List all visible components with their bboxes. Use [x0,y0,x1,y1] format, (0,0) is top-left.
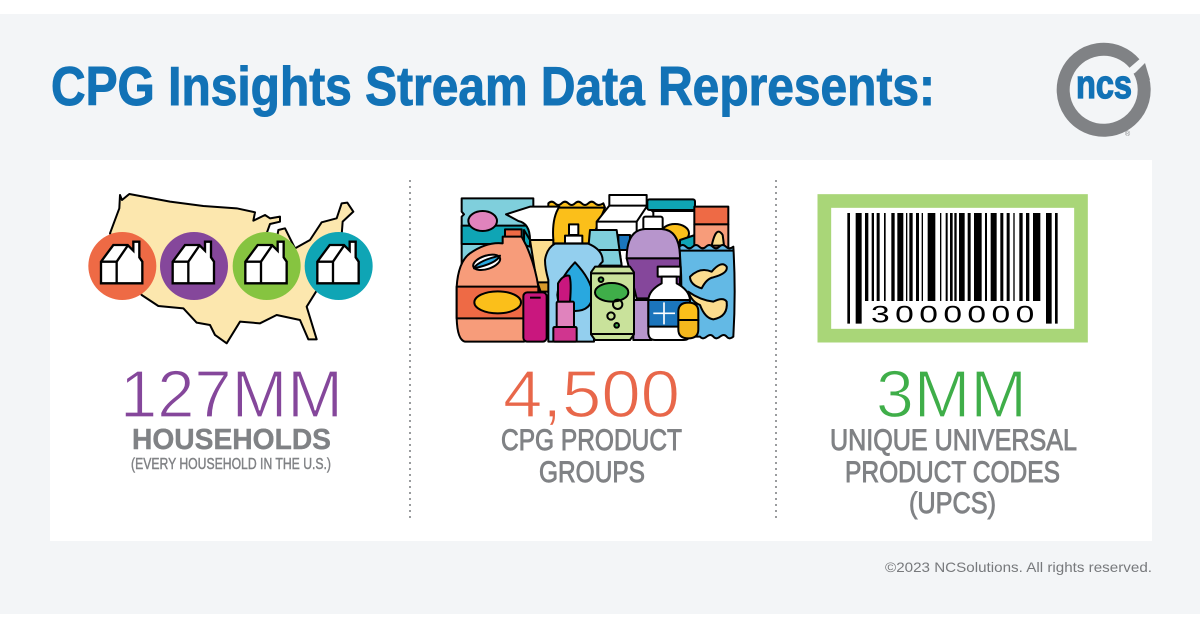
icon: barcode [824,201,1081,336]
label: CPG product groups: GROUPS [539,456,645,489]
chip bag [679,245,735,338]
teal box [647,199,695,210]
pill [678,303,698,320]
medicine bottle [658,267,681,277]
label: households: HOUSEHOLDS [132,424,331,456]
copyright: ©2023 NCSolutions. All rights reserved. [885,559,1152,575]
icon: barcode: 3000000 [871,302,1034,328]
green can [591,267,634,340]
label: unique UPCs: (UPCS) [909,487,996,520]
stat: 127MM: 127MM [120,357,343,432]
orange box [694,207,728,224]
icon: NCS logo: ncs [1076,63,1132,107]
spray bottle [506,207,559,240]
panel: product groups [457,195,735,489]
icon: NCS logo [1063,49,1150,138]
panel: households [88,194,373,473]
center teal bottle [587,230,622,266]
stat: 3MM: 3MM [876,357,1027,432]
label: CPG product groups [501,424,682,489]
yellow package [548,202,605,243]
title: CPG Insights Stream Data Represents: [51,55,935,117]
detergent jug [505,229,522,237]
icon: NCS logo: ® [1125,130,1131,138]
panel: UPCs [824,201,1081,520]
milk carton [597,195,663,248]
label: unique UPCs: PRODUCT CODES [845,456,1060,489]
stat: 4,500: 4,500 [503,357,680,432]
magenta cylinder [523,292,547,342]
label: CPG product groups: CPG PRODUCT [501,424,682,457]
back left box [462,198,533,265]
dish soap bottle [569,224,578,235]
icon: US map with houses [88,194,373,343]
lipstick [557,302,574,328]
note: every household: (EVERY HOUSEHOLD IN THE U.S.) [131,456,331,473]
panel: white content card [50,160,1152,541]
label: unique UPCs [830,424,1077,520]
label: unique UPCs: UNIQUE UNIVERSAL [830,424,1077,457]
purple bottle [643,217,663,230]
icon: CPG products [457,195,735,342]
